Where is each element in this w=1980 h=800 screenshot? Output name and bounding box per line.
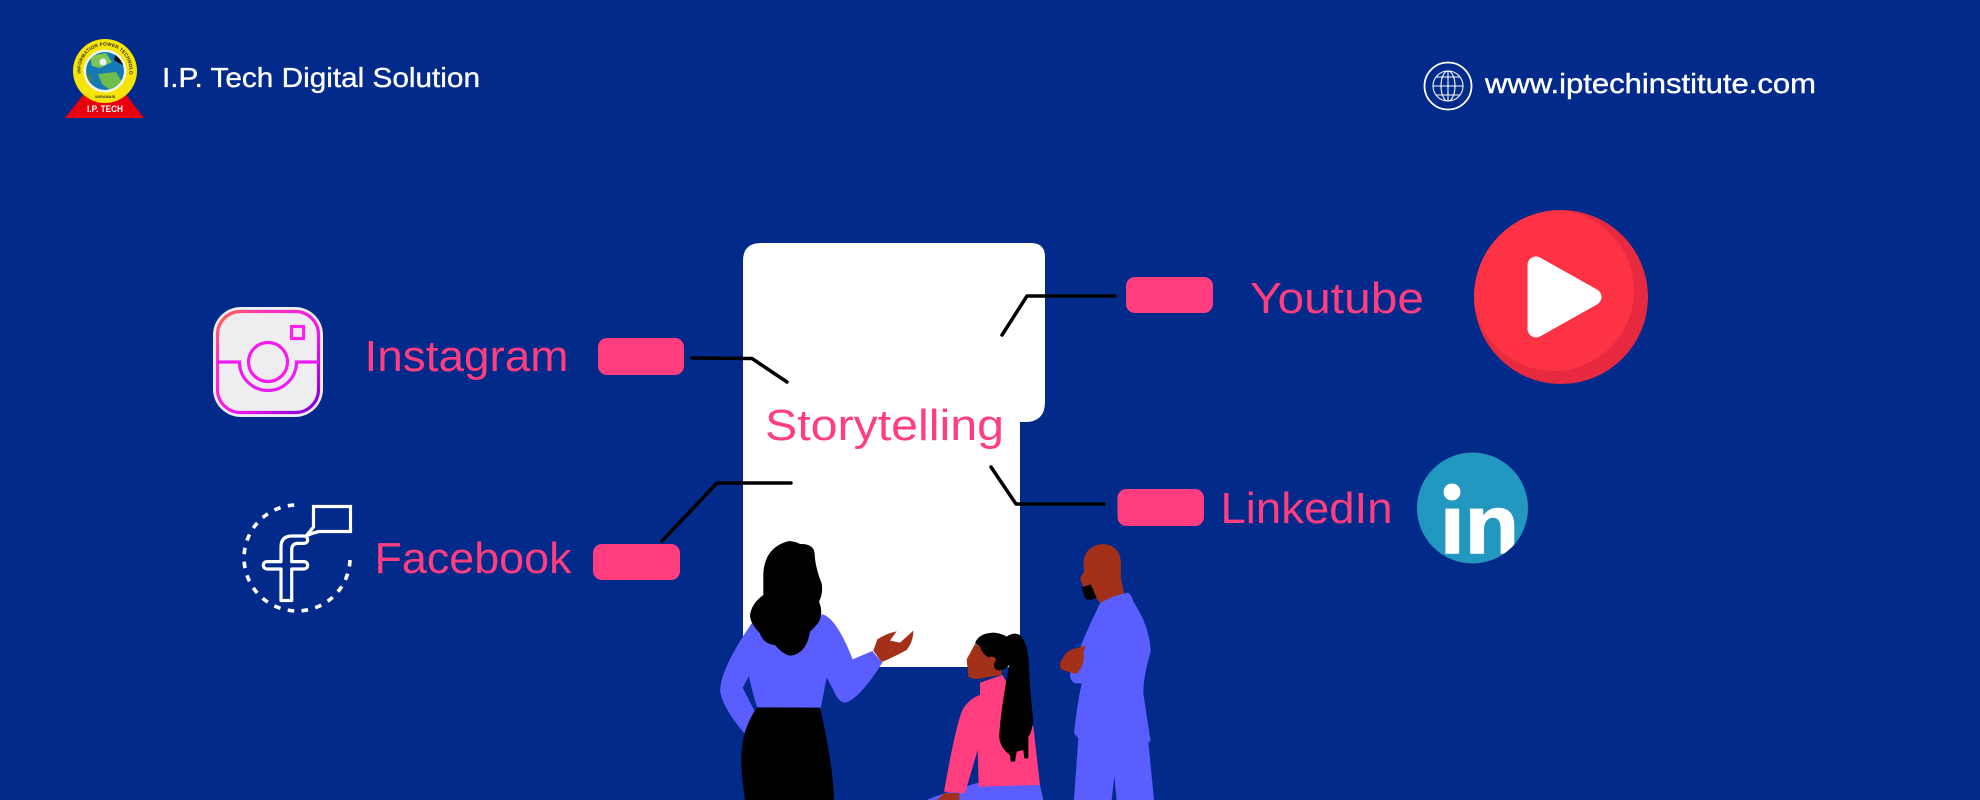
connector: Instagram — [692, 358, 787, 382]
connector: LinkedIn — [991, 467, 1104, 504]
connector: Youtube — [1002, 296, 1115, 335]
tag: Instagram — [598, 338, 684, 375]
illustration: three people — [720, 541, 1154, 800]
connector: Facebook — [662, 483, 791, 541]
logo: I.P. Tech badge: I.P. TECH — [87, 104, 123, 114]
label: Facebook: Facebook — [374, 534, 573, 583]
label: LinkedIn: LinkedIn — [1220, 484, 1392, 533]
icon: LinkedIn: in — [1440, 478, 1519, 571]
icon: globe — [1424, 62, 1472, 110]
heading: company name: I.P. Tech Digital Solution — [162, 62, 480, 93]
icon: Facebook — [244, 505, 350, 611]
panel: central white phone shape — [743, 243, 1045, 667]
person: standing man — [1060, 544, 1154, 800]
heading: Storytelling: Storytelling — [765, 401, 1004, 450]
tag: LinkedIn — [1118, 489, 1204, 526]
icon: LinkedIn — [1417, 452, 1528, 571]
logo: I.P. Tech badge — [65, 39, 144, 118]
tag: Youtube — [1126, 277, 1213, 313]
icon: Instagram — [213, 307, 323, 417]
person: seated woman — [927, 633, 1043, 800]
person: standing woman — [720, 541, 913, 800]
logo: I.P. Tech badge: VARANASI — [95, 94, 115, 99]
website url: www.iptechinstitute.com — [1484, 68, 1816, 99]
label: Instagram: Instagram — [364, 332, 568, 381]
label: Youtube: Youtube — [1250, 274, 1424, 323]
tag: Facebook — [593, 544, 680, 580]
icon: Youtube play button — [1473, 210, 1648, 384]
